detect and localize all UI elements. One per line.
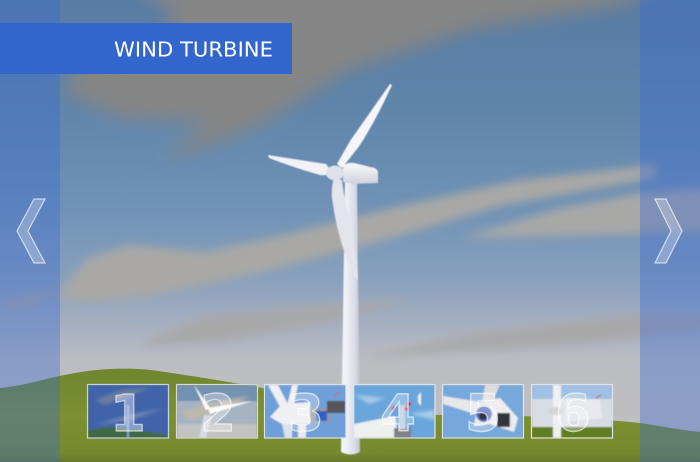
- title banner: WIND TURBINE: [114, 38, 273, 62]
- thumbnail 5: 5: [465, 385, 501, 444]
- nacelle: [343, 163, 378, 184]
- thumbnail 3: 3: [288, 385, 324, 444]
- thumbnail 5: [442, 384, 524, 444]
- icon: previous arrow: [17, 199, 45, 263]
- thumbnail 3: [264, 384, 346, 444]
- thumbnail 1: [88, 384, 168, 444]
- thumbnail 4: 4: [380, 385, 416, 444]
- tower: [341, 178, 360, 454]
- thumbnail 6: [532, 384, 612, 444]
- ground: green hills: [0, 369, 700, 462]
- red sensor: [369, 165, 373, 167]
- hub: [326, 166, 344, 180]
- blade: left: [268, 155, 332, 175]
- icon: next arrow: [655, 199, 682, 263]
- wind turbine: [268, 84, 392, 454]
- blade: downward: [332, 178, 358, 280]
- clouds: [0, 0, 700, 358]
- thumbnail 6: 6: [555, 385, 591, 444]
- thumbnail 4: [354, 384, 435, 444]
- blade: upward: [337, 84, 392, 168]
- thumbnail 2: 2: [200, 385, 236, 444]
- thumbnail 2: [176, 384, 258, 444]
- thumbnail 1: 1: [110, 385, 146, 444]
- title banner: [0, 23, 292, 74]
